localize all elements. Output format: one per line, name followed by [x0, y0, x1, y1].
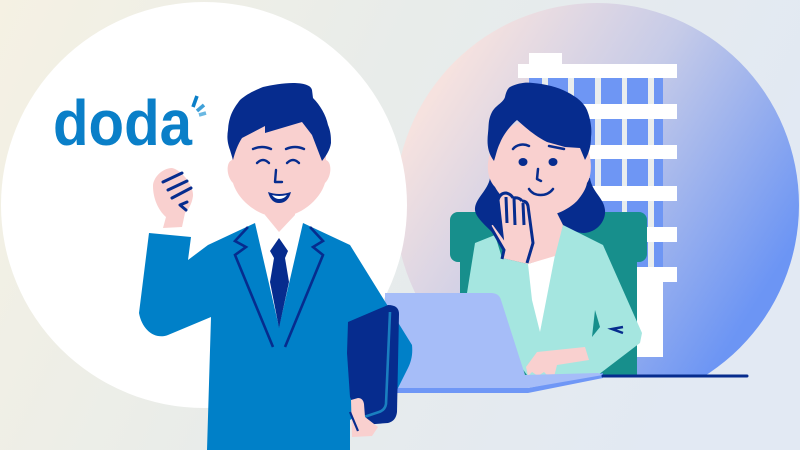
- logo: [53, 87, 206, 159]
- teeth: [272, 195, 287, 199]
- raised hand fill: [490, 193, 533, 264]
- sleeve crease: [592, 310, 600, 337]
- face: [228, 108, 330, 217]
- hand line: [350, 412, 358, 431]
- man: [139, 83, 412, 450]
- raised hand outline: [490, 193, 533, 263]
- lapels: [235, 227, 323, 347]
- binder stripe: [364, 312, 390, 417]
- floors: [518, 53, 677, 357]
- back hair: [475, 178, 605, 236]
- windows: [529, 78, 663, 270]
- suit: [139, 223, 412, 450]
- gradient circle: [395, 3, 799, 407]
- laptop: [385, 293, 603, 393]
- hair: [227, 83, 331, 161]
- fist fingers: [163, 173, 191, 210]
- sleeve button: [612, 327, 623, 333]
- resting hand: [526, 347, 589, 377]
- holding hand: [351, 398, 378, 437]
- binder: [347, 305, 399, 425]
- building: [518, 53, 677, 357]
- neck: [525, 205, 563, 264]
- jacket: [467, 225, 642, 375]
- shirt: [528, 255, 555, 332]
- woman face details: [513, 145, 564, 195]
- raised fist: [153, 168, 193, 228]
- chair: [450, 212, 647, 375]
- neck: [263, 205, 295, 232]
- man face details: [253, 147, 304, 182]
- logo sparks: [193, 96, 206, 115]
- shirt: [255, 215, 303, 330]
- laptop screen: [385, 293, 603, 388]
- mouth: [268, 192, 291, 203]
- desk line: [603, 374, 747, 378]
- woman: [467, 83, 642, 377]
- tie: [270, 238, 289, 328]
- front hair: [488, 83, 591, 161]
- laptop base edge: [385, 373, 603, 393]
- face: [488, 120, 591, 216]
- white circle: [1, 2, 407, 408]
- logo text: doda: [53, 87, 192, 159]
